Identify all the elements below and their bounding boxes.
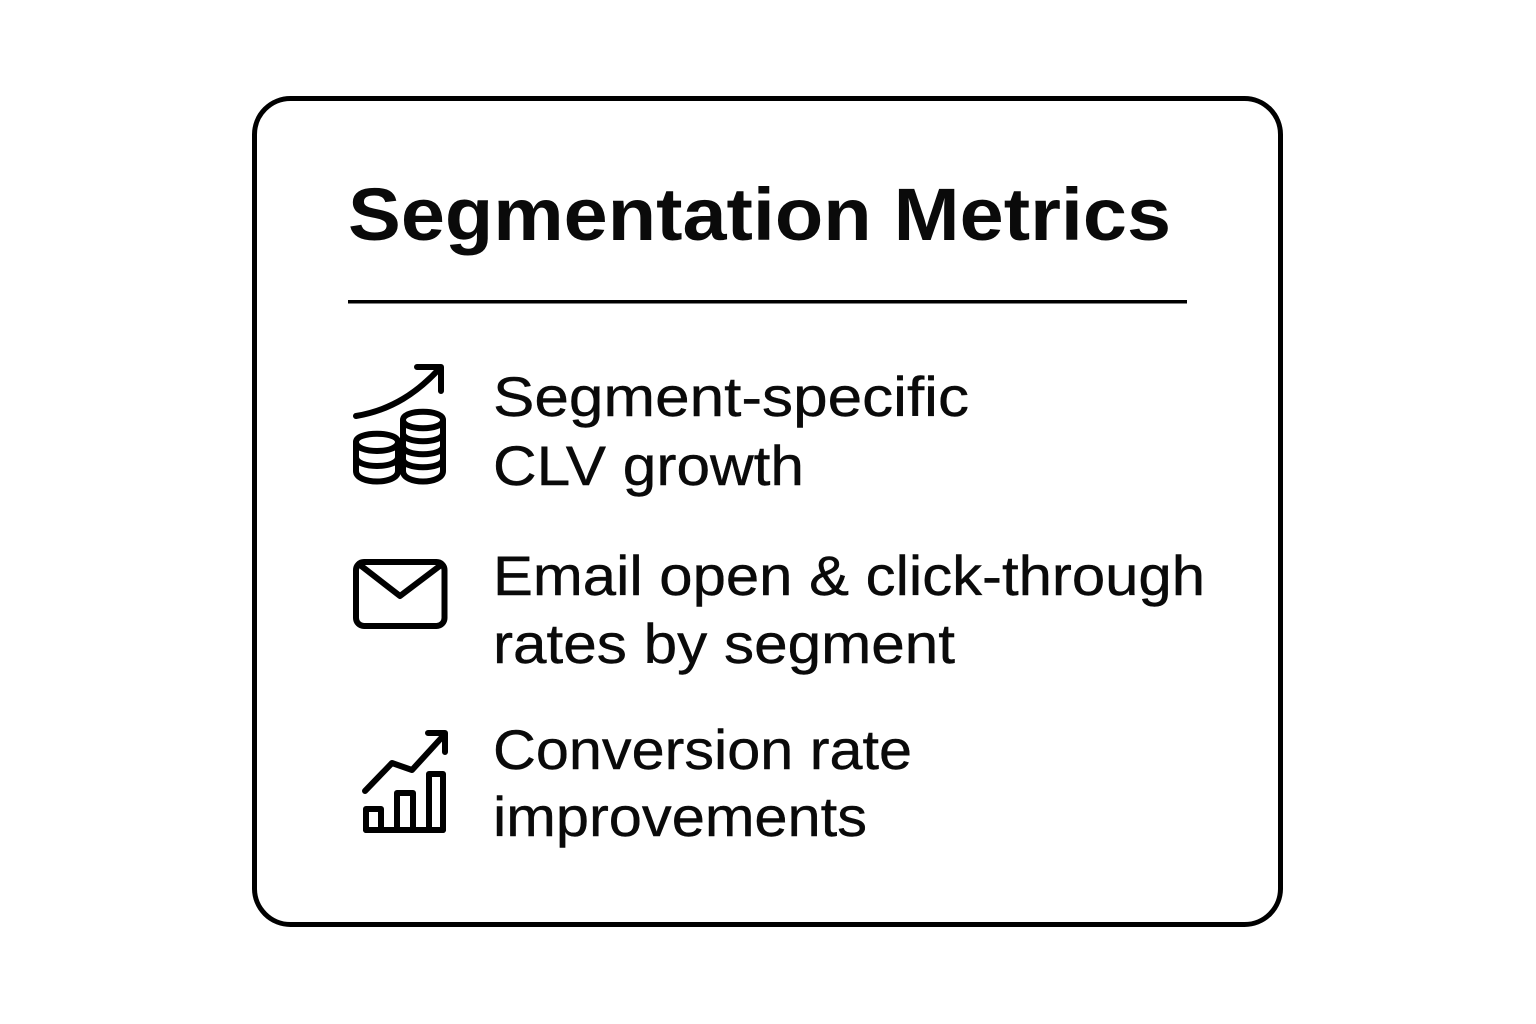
icon: rising arrow over coin stacks	[356, 367, 443, 482]
text: email open and click-through rates by segment: rates by segment	[493, 612, 955, 675]
icon: envelope	[356, 562, 444, 626]
metric: conversion rate	[365, 718, 912, 848]
text: conversion rate improvements: improvements	[493, 785, 867, 848]
text: segment-specific CLV growth: Segment-specific	[493, 365, 969, 428]
text: segment-specific CLV growth: CLV growth	[493, 434, 804, 497]
text: email open and click-through rates by segment: Email open & click-through	[493, 544, 1205, 607]
icon: bar chart with rising arrow	[365, 733, 445, 830]
metric: CLV growth	[356, 365, 969, 497]
metric: email rates	[356, 544, 1205, 675]
title: Segmentation Metrics	[348, 173, 1171, 256]
panel: segmentation metrics card	[254, 98, 1280, 924]
text: conversion rate improvements: Conversion rate	[493, 718, 912, 781]
